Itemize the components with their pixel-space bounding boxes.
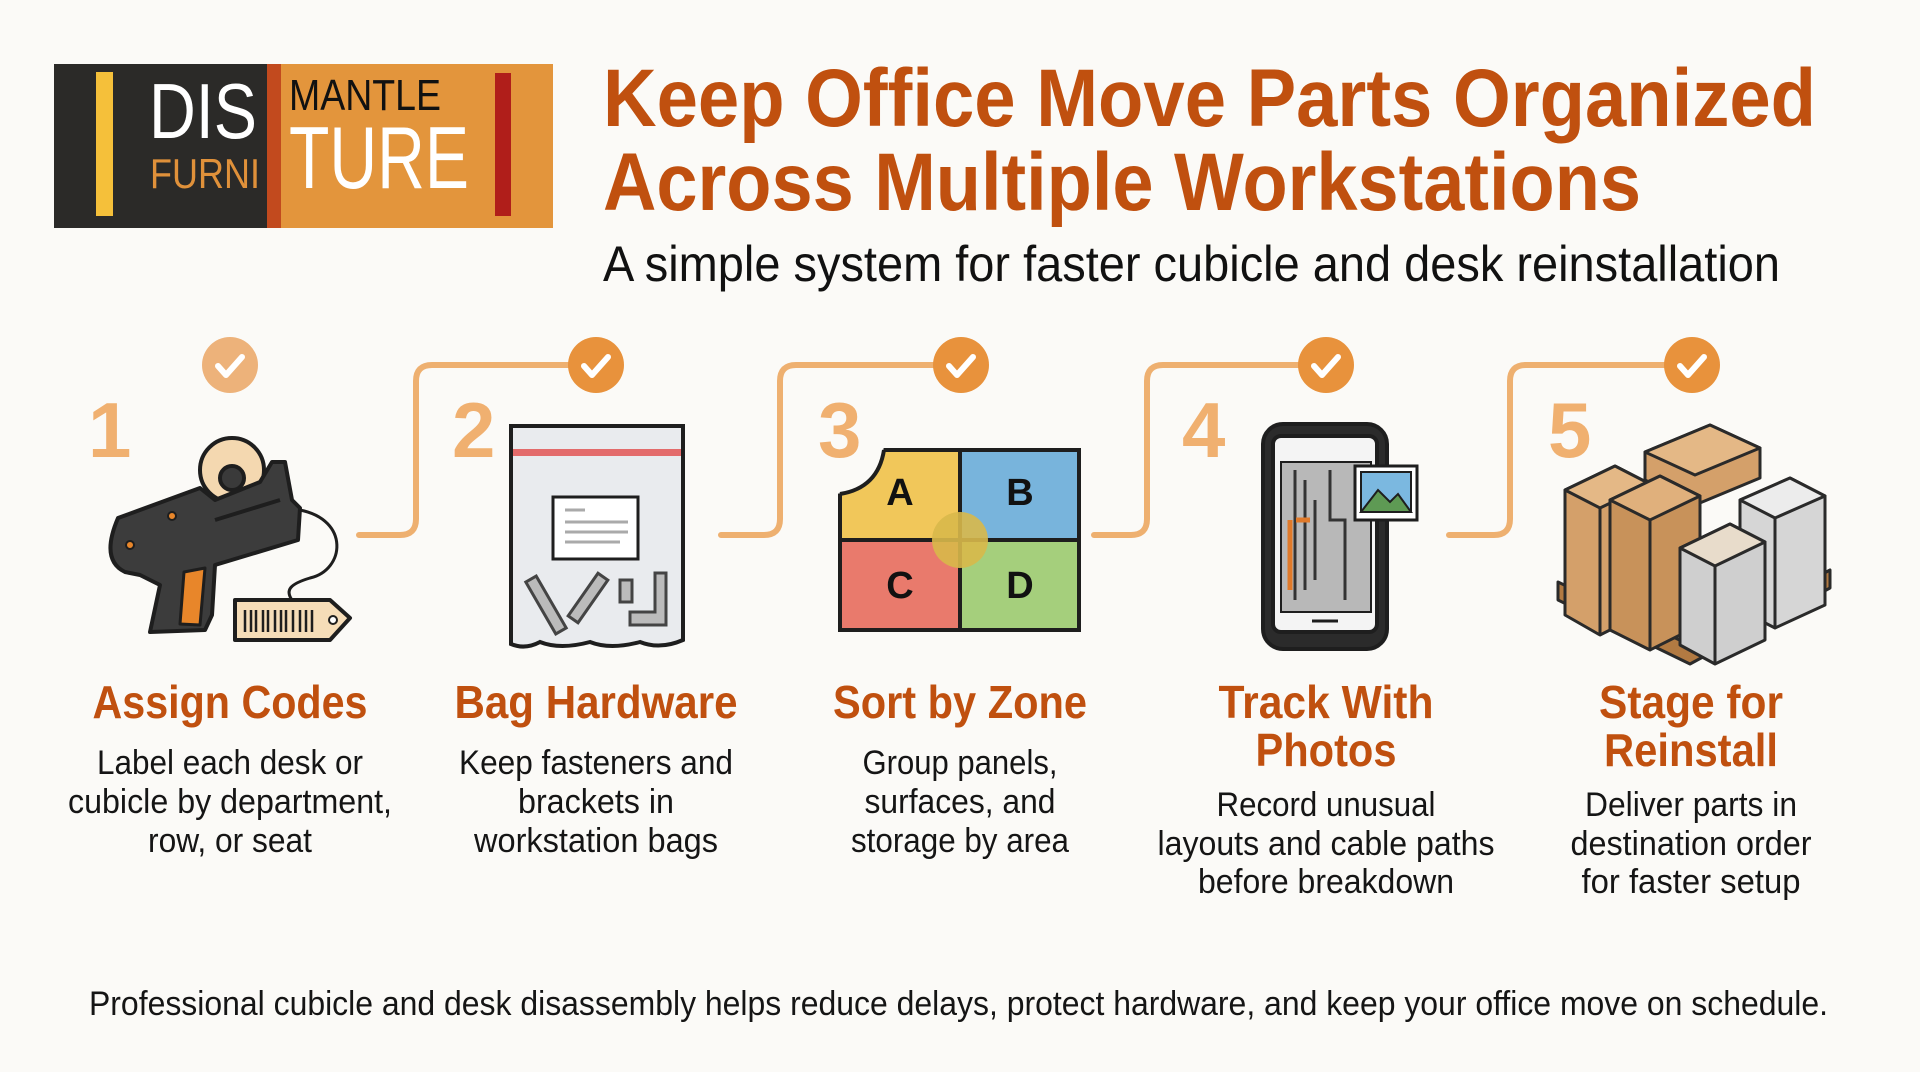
step headings: Track With	[1218, 676, 1434, 728]
step headings: Assign Codes	[92, 676, 368, 728]
step numbers: 1	[88, 386, 131, 474]
icon: zone puzzle: C	[886, 565, 914, 607]
step descriptions: surfaces, and	[864, 783, 1056, 821]
step descriptions: Keep fasteners and	[459, 744, 733, 782]
connectors	[359, 365, 1665, 535]
step descriptions: workstation bags	[473, 822, 718, 860]
icon: label gun with tag	[110, 438, 350, 640]
logo: DIS	[149, 67, 257, 155]
title	[603, 53, 1816, 228]
subtitle: A simple system for faster cubicle and desk reinstallation	[603, 236, 1780, 292]
icon: hardware bag	[511, 426, 683, 647]
icon: zone puzzle: B	[1006, 472, 1034, 514]
step headings	[92, 676, 1783, 776]
step numbers	[88, 386, 1591, 474]
check circles	[202, 337, 1720, 393]
step descriptions: Group panels,	[862, 744, 1058, 782]
title: Keep Office Move Parts Organized	[603, 53, 1816, 144]
step numbers: 3	[818, 386, 861, 474]
step descriptions: storage by area	[851, 822, 1069, 860]
step descriptions: Deliver parts in	[1585, 786, 1797, 824]
step numbers: 4	[1182, 386, 1225, 474]
icon: zone puzzle: D	[1006, 565, 1034, 607]
step descriptions: before breakdown	[1198, 863, 1454, 901]
step headings: Bag Hardware	[454, 676, 738, 728]
logo: TURE	[289, 108, 469, 207]
step headings: Photos	[1256, 724, 1396, 776]
step headings: Reinstall	[1604, 724, 1778, 776]
step descriptions: for faster setup	[1582, 863, 1800, 901]
icon: zone puzzle: A	[886, 472, 914, 514]
step descriptions: brackets in	[518, 783, 674, 821]
step descriptions: destination order	[1570, 825, 1812, 863]
step descriptions	[68, 744, 1812, 901]
step descriptions: Record unusual	[1216, 786, 1436, 824]
icon: staged pallets	[1558, 425, 1830, 664]
logo: FURNI	[150, 150, 260, 197]
logo: MANTLE	[289, 71, 441, 120]
step descriptions: layouts and cable paths	[1158, 825, 1494, 863]
icon: phone with photo	[1263, 424, 1417, 649]
step numbers: 5	[1548, 386, 1591, 474]
footer: Professional cubicle and desk disassembly helps reduce delays, protect hardware, and keep your office move on schedule.	[89, 985, 1828, 1023]
step descriptions: cubicle by department,	[68, 783, 392, 821]
step numbers: 2	[452, 386, 495, 474]
title: Across Multiple Workstations	[603, 137, 1641, 228]
step headings: Stage for	[1599, 676, 1783, 728]
step descriptions: Label each desk or	[97, 744, 363, 782]
icon: zone puzzle	[836, 446, 1079, 630]
step headings: Sort by Zone	[833, 676, 1087, 728]
step descriptions: row, or seat	[148, 822, 313, 860]
logo	[54, 64, 553, 228]
